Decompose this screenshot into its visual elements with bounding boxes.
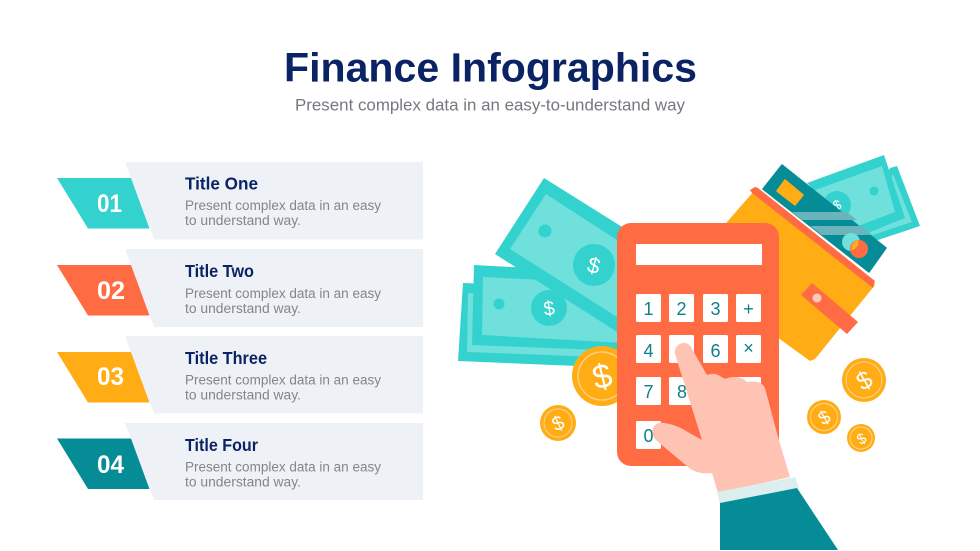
icon: coin right top — [842, 358, 886, 402]
number: 02 — [97, 277, 125, 305]
number: 04 — [97, 451, 124, 479]
icon: lower banknotes: $ — [542, 297, 556, 321]
item description: to understand way. — [185, 213, 301, 228]
illustration: finance calculator scene — [458, 155, 920, 550]
key labels: 6 — [710, 341, 721, 361]
key labels: 1 — [643, 299, 654, 319]
icon: coin right bottom: $ — [854, 430, 870, 449]
icon: large coin: $ — [588, 356, 616, 398]
item description: to understand way. — [185, 474, 301, 490]
key labels: 3 — [710, 299, 721, 319]
list item 4 — [57, 423, 423, 500]
key labels — [643, 299, 754, 446]
calculator — [617, 223, 779, 466]
key labels: + — [743, 299, 754, 319]
card background — [125, 249, 423, 327]
number tag — [57, 352, 150, 402]
calculator display — [636, 244, 762, 265]
icon: banknotes in wallet — [807, 155, 920, 240]
card background — [125, 423, 423, 500]
key labels: 8 — [677, 382, 687, 402]
icon: coin right top: $ — [851, 365, 878, 396]
subtitle: Present complex data in an easy-to-understand way — [295, 96, 685, 114]
icon: coin right bottom — [847, 424, 875, 452]
key labels: 0 — [643, 426, 654, 446]
item description: Present complex data in an easy — [185, 460, 381, 474]
item title: Title One — [185, 174, 258, 194]
item title: Title Two — [185, 261, 254, 281]
jacket sleeve — [720, 488, 838, 550]
key labels: 2 — [676, 299, 687, 319]
item description: Present complex data in an easy — [185, 198, 381, 213]
item description: to understand way. — [185, 388, 301, 402]
calculator keys — [636, 294, 761, 449]
icon: lower banknotes — [458, 265, 625, 368]
number: 01 — [97, 190, 122, 218]
calculator body — [617, 223, 779, 466]
list item 2 — [57, 249, 423, 327]
icon: upper banknote — [495, 178, 675, 337]
number: 03 — [97, 363, 124, 391]
number tag — [57, 178, 150, 228]
icon: credit card — [763, 165, 886, 272]
item description: to understand way. — [185, 301, 301, 316]
hand — [652, 343, 790, 493]
icon: coin right middle — [807, 400, 841, 434]
key labels: 4 — [643, 341, 654, 361]
shirt cuff — [717, 477, 799, 504]
icon: small coin left: $ — [549, 412, 568, 436]
number tag — [57, 438, 150, 489]
icon: banknotes in wallet: $ — [831, 196, 844, 214]
icon: coin right middle: $ — [815, 406, 835, 430]
icon: large coin — [572, 346, 632, 406]
key labels: × — [743, 338, 754, 358]
item title: Title Three — [185, 348, 267, 368]
number tag — [57, 265, 150, 316]
card background — [125, 336, 423, 414]
title: Finance Infographics — [284, 44, 697, 90]
icon: upper banknote: $ — [585, 252, 603, 279]
item title: Title Four — [185, 435, 258, 455]
list item 3 — [57, 336, 423, 414]
card background — [125, 162, 423, 240]
icon: wallet — [700, 187, 875, 361]
key labels: 7 — [643, 382, 654, 402]
list item 1 — [57, 162, 423, 240]
hand pressing keys — [652, 343, 838, 550]
icon: small coin left — [540, 405, 576, 441]
item description: Present complex data in an easy — [185, 372, 381, 388]
item description: Present complex data in an easy — [185, 286, 381, 301]
